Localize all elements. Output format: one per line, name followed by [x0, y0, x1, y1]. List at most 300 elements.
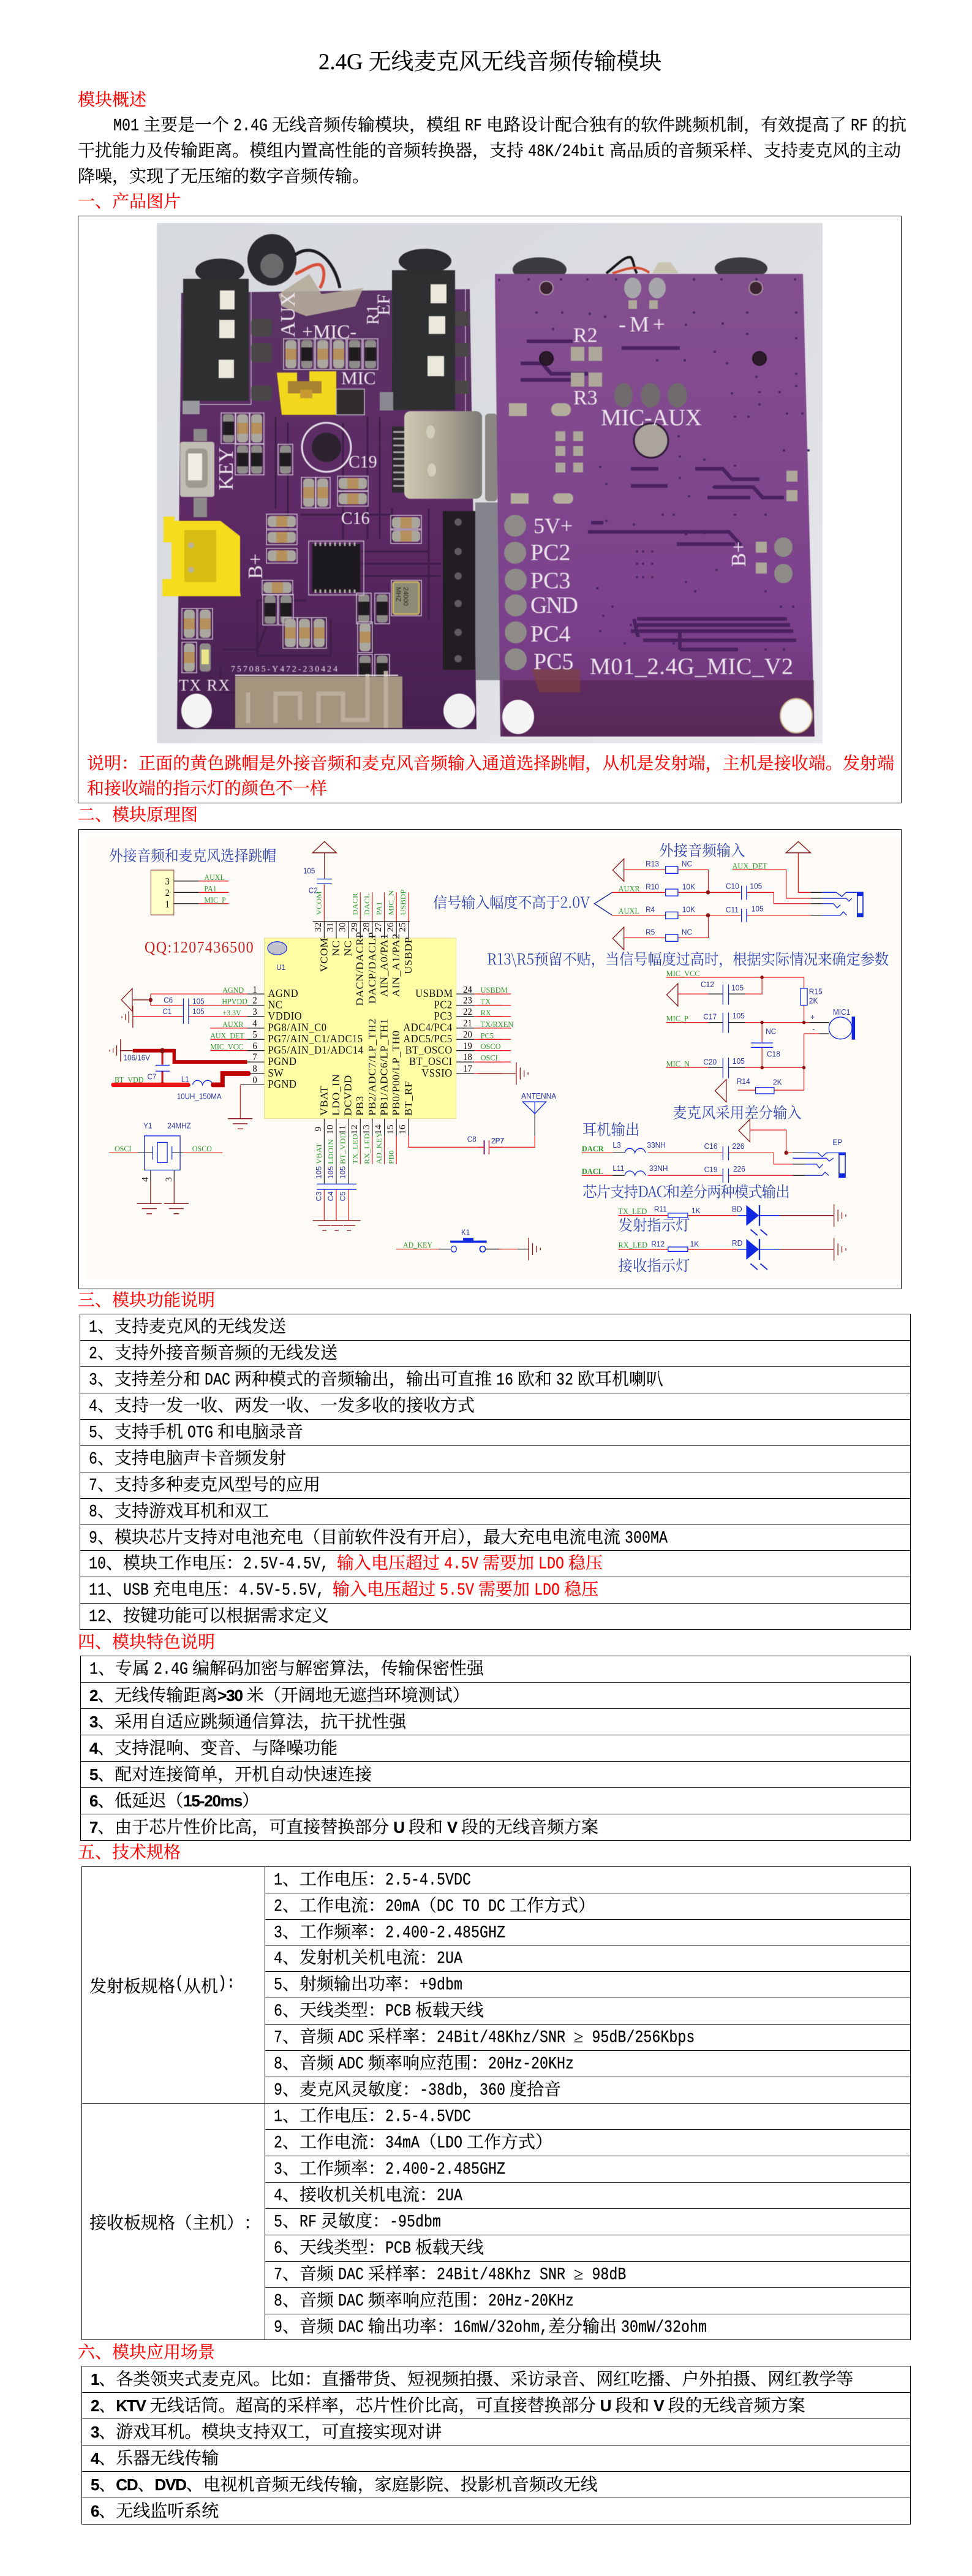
item 11: 、 充电电压： 输入电压超过 需要加 稳压 — [106, 1580, 598, 1599]
silkscreen labels back: R3 — [573, 387, 598, 409]
item 9: 9 — [89, 1529, 97, 1548]
item 10: 4.5V — [444, 1555, 478, 1574]
earphone output: 芯片支持DAC和差分两种模式输出 — [582, 1180, 790, 1202]
microphone input: C20 — [703, 1058, 717, 1067]
chip U1: AGND — [268, 987, 298, 999]
spec 9 — [265, 2077, 910, 2104]
spec 8: 、音频 频率响应范围： — [282, 2054, 488, 2073]
spec 9: 、音频 输出功率： 差分输出 — [282, 2317, 617, 2336]
spec 7: ADC — [338, 2029, 364, 2048]
bottom pins: 16 — [397, 1124, 407, 1134]
crystal Y1: Y1 — [143, 1121, 153, 1131]
left pins: AGND — [222, 986, 244, 994]
mounting slots front — [181, 694, 475, 728]
earphone output: EP — [832, 1138, 842, 1146]
bottom pins: BT_VDD — [339, 1132, 347, 1164]
crystal — [391, 580, 421, 616]
spec 8: 8 — [274, 2292, 282, 2311]
item 8 — [80, 1499, 910, 1525]
right pins: 17 — [463, 1064, 472, 1074]
spec 3 — [265, 1920, 910, 1945]
left pins: C6 — [164, 996, 173, 1005]
feature 2: 2、无线传输距离>30米（开阔地无遮挡环境测试） — [89, 1686, 470, 1705]
heading: module overview: 模块概述 — [78, 91, 146, 110]
spec 4: 、接收机关机电流： — [282, 2186, 437, 2205]
net labels: TX — [481, 997, 491, 1006]
table: application scenarios — [81, 2366, 911, 2525]
crystal Y1: OSCO — [192, 1145, 212, 1153]
silkscreen labels front: KEY — [215, 447, 238, 490]
TX LED: TX_LED — [619, 1207, 647, 1216]
top pins: DACL — [363, 893, 371, 915]
bottom pins — [313, 1119, 504, 1230]
item 2: 2 — [89, 1345, 97, 1364]
net labels: OSCO — [481, 1042, 501, 1051]
feature 1 — [81, 1656, 910, 1683]
microphone input: R14 — [737, 1077, 750, 1086]
spec 9: 360 — [480, 2082, 505, 2101]
microphone input: 麦克风采用差分输入 — [672, 1100, 802, 1123]
bottom pins: C4 — [327, 1191, 335, 1201]
top pins: 31 — [325, 922, 335, 932]
item 8: 、支持游戏耳机和双工 — [97, 1502, 269, 1521]
left pins: HPVDD — [222, 997, 247, 1006]
silkscreen labels front: EF — [374, 294, 394, 316]
item 3: 3 — [89, 1371, 97, 1390]
right pins: 24 — [463, 985, 472, 995]
chip U1: BT_RF — [402, 1081, 414, 1116]
jumper cap — [277, 371, 364, 415]
net labels — [478, 986, 528, 1085]
top pins: 28 — [361, 922, 371, 932]
external audio input: 外接音频输入 — [659, 838, 745, 860]
external audio input: NC — [682, 928, 692, 937]
antenna: 2P7 — [491, 1137, 504, 1145]
microphone input: 105 — [733, 1057, 745, 1066]
earphone output: DACL — [582, 1167, 603, 1176]
table: module functions — [80, 1314, 911, 1630]
RX LED: 1K — [690, 1240, 699, 1249]
table: module features — [80, 1656, 911, 1841]
feature 3 — [81, 1709, 910, 1735]
spec 4: 4 — [274, 1950, 282, 1969]
spec 4: 4 — [274, 2187, 282, 2206]
item 11 — [80, 1577, 910, 1604]
R13 R5 note: R13\R5预留不贴，当信号幅度过高时，根据实际情况来确定参数 — [487, 947, 889, 969]
feature 1: 、专属 编解码加密与解密算法，传输保密性强 — [98, 1659, 484, 1678]
spec 7: 98dB — [592, 2266, 626, 2285]
spec 2: 20mA — [385, 1898, 420, 1917]
RX LED — [619, 1238, 846, 1275]
item 9 — [80, 1525, 910, 1551]
label: transmitter board — [82, 1867, 265, 2104]
silkscreen labels front: R1 — [364, 305, 383, 325]
spec 7 — [265, 2025, 910, 2051]
earphone output: C16 — [704, 1142, 718, 1151]
spec 6: 、天线类型： 板载天线 — [282, 2001, 484, 2020]
feature 3: 3、采用自适应跳频通信算法，抗干扰性强 — [89, 1713, 406, 1732]
microphone input: C12 — [701, 980, 714, 989]
feature 4 — [81, 1735, 910, 1762]
spec 3: 2.400-2.485GHZ — [385, 1924, 505, 1943]
spec 7: 95dB/256Kbps — [592, 2029, 695, 2048]
left pins: 8 — [252, 1064, 257, 1074]
item 3: DAC — [205, 1371, 230, 1390]
top pins: DACR — [351, 893, 359, 915]
microphone capsule — [247, 234, 363, 316]
item 5: OTG — [187, 1424, 213, 1443]
bottom pins: 105 — [339, 1166, 347, 1179]
microphone input: 2K — [809, 996, 818, 1006]
scenario 5: 5、CD、DVD、电视机音频无线传输，家庭影院、投影机音频改无线 — [91, 2476, 598, 2495]
scenario 6: 6、无线监听系统 — [91, 2502, 219, 2521]
spec 6: PCB — [385, 2002, 411, 2021]
spec 9: 16mW/32ohm, — [454, 2319, 548, 2338]
chip U1: AIN_A0/PA1 — [379, 933, 390, 997]
microphone input — [666, 969, 855, 1123]
scenario 2 — [82, 2393, 910, 2419]
chip U1: LDO_IN — [331, 1074, 342, 1116]
mounting hole — [302, 423, 351, 472]
spec 9: 9 — [274, 2082, 282, 2101]
right half of schematic — [433, 838, 889, 1275]
item 12: 12 — [89, 1608, 106, 1627]
jumper header — [109, 844, 276, 915]
left pins: MIC_VCC — [210, 1042, 243, 1051]
microphone input: 105 — [731, 983, 744, 992]
text block: overview paragraph: 2.4G — [233, 117, 268, 136]
spec 9: DAC — [338, 2319, 364, 2338]
spec 9: 、麦克风灵敏度： ， 度拾音 — [282, 2080, 561, 2099]
chip U1: NC — [268, 999, 282, 1011]
spec 6: 6 — [274, 2240, 282, 2259]
spec 7: 24Bit/48Khz/SNR — [437, 2029, 565, 2048]
text block: overview paragraph: RF — [465, 117, 482, 136]
vias — [499, 279, 808, 650]
external audio input: AUX_DET — [732, 862, 767, 871]
text block: red note: 说明：正面的黄色跳帽是外接音频和麦克风音频输入通道选择跳帽，从机是发射端，主机是接收端。发射端 — [87, 754, 894, 773]
microphone input: 105 — [733, 1012, 745, 1020]
item 4: 、支持一发一收、两发一收、一发多收的接收方式 — [97, 1396, 475, 1415]
feature 7: 7、由于芯片性价比高，可直接替换部分 U段和 V段的无线音频方案 — [89, 1818, 598, 1837]
feature 6: 6、低延迟（15-20ms） — [89, 1792, 259, 1811]
net labels: RX — [481, 1009, 491, 1017]
earphone output: DACR — [582, 1145, 604, 1153]
earphone output: 耳机输出 — [582, 1117, 639, 1139]
chip U1: PB3 — [355, 1096, 366, 1116]
TX LED: 1K — [691, 1207, 701, 1215]
spec 8: ADC — [338, 2055, 364, 2074]
spec 6 — [265, 2235, 910, 2262]
spec 8 — [265, 2288, 910, 2314]
power section: BT_VDD — [115, 1075, 144, 1085]
crystal Y1: OSCI — [115, 1145, 131, 1153]
left pins: 6 — [252, 1040, 257, 1051]
chip U1: PGND — [268, 1055, 296, 1067]
transmitter spec rows — [265, 1870, 910, 2104]
spec 5: 5 — [274, 1976, 282, 1995]
net labels: OSCI — [481, 1053, 498, 1063]
top pins: 25 — [397, 922, 407, 932]
external audio input: R4 — [646, 905, 655, 914]
item 9: 、模块芯片支持对电池充电（目前软件没有开启），最大充电电流电流 — [97, 1528, 620, 1547]
silkscreen labels back: B+ — [728, 541, 750, 567]
QQ contact: QQ:1207436500 — [145, 939, 254, 957]
spec 3: 3 — [274, 2161, 282, 2180]
spec 5: 5 — [274, 2213, 282, 2232]
external audio input: AUXL — [619, 907, 639, 915]
spec 9: -38db — [420, 2082, 462, 2101]
external audio input: C11 — [726, 906, 739, 914]
key K1 — [396, 1228, 502, 1252]
power section: L1 — [181, 1075, 189, 1084]
silkscreen labels back: 5V+ — [533, 513, 573, 538]
spec 3: 、工作频率： — [282, 2159, 385, 2178]
spec 8: DAC — [338, 2292, 364, 2311]
chip U1: PG5/AIN_D1/ADC14 — [268, 1044, 364, 1056]
microphone input: MIC_P — [666, 1014, 688, 1023]
chip U1: VCOM — [318, 938, 330, 972]
silkscreen labels back: PC4 — [530, 621, 570, 647]
right pins: 19 — [463, 1040, 472, 1051]
label: receiver board — [82, 2104, 265, 2339]
spec 2: 34mA — [385, 2134, 420, 2153]
silkscreen labels front: +MIC- — [302, 320, 356, 343]
item 6 — [80, 1446, 910, 1472]
mounting holes back — [502, 281, 812, 734]
item 4 — [80, 1393, 910, 1420]
item 3: 16 — [496, 1371, 513, 1390]
top pins: 29 — [349, 922, 360, 932]
chip U1: U1 — [276, 963, 285, 972]
item 5: 、支持手机 和电脑录音 — [97, 1423, 303, 1442]
silkscreen labels back: M01_2.4G_MIC_V2 — [590, 654, 793, 680]
crystal Y1 — [109, 1121, 222, 1214]
text block: overview paragraph: M01 — [113, 117, 139, 136]
item 11: 11 — [89, 1582, 106, 1601]
heading: module features: 四、模块特色说明 — [78, 1633, 215, 1652]
spec 2 — [265, 2130, 910, 2156]
external audio input: R13 — [646, 860, 659, 868]
spec 4 — [265, 2183, 910, 2209]
spec 5: 、射频输出功率： — [282, 1975, 420, 1994]
silkscreen labels front: B+ — [244, 553, 267, 579]
tact switch — [180, 429, 214, 517]
item 11: USB — [123, 1582, 149, 1601]
item 11: 4.5V-5.5V, — [239, 1582, 325, 1601]
spec 3 — [265, 2156, 910, 2183]
chip U1: DCVDD — [342, 1075, 353, 1116]
heading: schematic: 二、模块原理图 — [78, 806, 198, 825]
bottom pins: C5 — [339, 1191, 347, 1201]
text block: overview paragraph: 干扰能力及传输距离。模组内置高性能的音频转换器，支持 高品质的音频采样、支持麦克风的主动 — [78, 142, 901, 161]
spec 9: 9 — [274, 2319, 282, 2338]
item 4: 4 — [89, 1398, 97, 1417]
earphone output: C19 — [704, 1165, 718, 1174]
item 12: 、按键功能可以根据需求定义 — [106, 1607, 329, 1626]
microphone input: R15 — [809, 987, 823, 996]
spec 1: 2.5-4.5VDC — [385, 1871, 471, 1890]
spec 9: 30mW/32ohm — [621, 2319, 707, 2338]
item 8: 8 — [89, 1503, 97, 1522]
spec 1 — [265, 1867, 910, 1893]
net labels: TX/RXEN — [481, 1020, 513, 1029]
spec 8: 20Hz-20KHz — [488, 2055, 574, 2074]
spec 2: 2 — [274, 2134, 282, 2153]
item 10: 10 — [89, 1555, 106, 1574]
panel: schematic — [78, 829, 902, 1289]
spec 1 — [265, 2104, 910, 2130]
bottom pins: RX_LED — [363, 1134, 371, 1164]
signal amplitude note: 信号输入幅度不高于2.0V — [433, 890, 590, 912]
label: transmitter board: 发射板规格 从机 — [89, 1977, 218, 1996]
silkscreen labels front — [179, 292, 394, 694]
feature 4: 4、支持混响、变音、与降噪功能 — [89, 1739, 337, 1758]
scenario 2: 2、KTV无线话筒。超高的采样率，芯片性价比高，可直接替换部分 U段和 V段的无线音频方案 — [91, 2396, 805, 2415]
scenario 1: 1、各类领夹式麦克风。比如：直播带货、短视频拍摄、采访录音、网红吃播、户外拍摄、网红教学等 — [91, 2370, 853, 2389]
net labels: USBDM — [481, 986, 508, 994]
crystal: MHZ — [394, 587, 402, 602]
spec 3: 、工作频率： — [282, 1923, 385, 1942]
feature 2 — [81, 1683, 910, 1709]
power section: 10UH_150MA — [177, 1092, 222, 1101]
crystal: 24000 — [402, 587, 409, 606]
spec 3: 3 — [274, 1924, 282, 1943]
item 6: 6 — [89, 1450, 97, 1469]
chip U1: DACN/DACRP — [355, 931, 366, 1006]
top pins: 32 — [314, 922, 323, 932]
feature 1: 1 — [89, 1661, 98, 1680]
left pins: 0 — [252, 1075, 257, 1086]
chip U1: NC — [331, 940, 342, 957]
RX LED: RD — [732, 1239, 742, 1248]
label: receiver board: ： — [244, 2213, 261, 2233]
silkscreen labels front: TX RX — [179, 676, 230, 694]
bottom pins: TX_LED — [351, 1134, 359, 1164]
scenario 1 — [82, 2366, 910, 2393]
bottom pins: 105 — [315, 1166, 323, 1179]
spec 5 — [265, 1972, 910, 1998]
left pins: C1 — [163, 1007, 172, 1016]
bottom pins: 10 — [325, 1124, 335, 1134]
external audio input — [595, 838, 863, 950]
top pins: MIC_N — [387, 890, 395, 915]
item 5 — [80, 1420, 910, 1446]
silkscreen labels front: C19 — [348, 453, 377, 472]
heading: technical specs: 五、技术规格 — [78, 1843, 181, 1862]
feature 5 — [81, 1762, 910, 1788]
earphone output — [582, 1117, 845, 1202]
silkscreen labels front: MIC — [341, 368, 376, 388]
right pins: 22 — [463, 1007, 472, 1017]
spec 1: 2.5-4.5VDC — [385, 2108, 471, 2127]
left pins — [121, 985, 265, 1086]
item 1 — [80, 1314, 910, 1341]
right pins: 18 — [463, 1052, 472, 1063]
spec 4: 2UA — [437, 2187, 462, 2206]
spec 5: RF — [300, 2213, 317, 2232]
spec 7: 24Bit/48Khz SNR — [437, 2266, 565, 2285]
audio jack left — [183, 259, 272, 414]
scenario 4 — [82, 2445, 910, 2472]
group: receiver board specs — [89, 2104, 910, 2339]
spec 5: +9dbm — [420, 1976, 462, 1995]
chip U1: PC3 — [434, 1010, 453, 1022]
item 1: 、支持麦克风的无线发送 — [97, 1317, 286, 1336]
RX LED: R12 — [651, 1240, 665, 1249]
spec 5: -95dbm — [390, 2213, 441, 2232]
table: technical specs — [81, 1866, 911, 2340]
left pins: 4 — [252, 1018, 257, 1029]
spec 2: 、工作电流： （ 工作方式） — [282, 1896, 595, 1915]
microphone input: + — [810, 1012, 815, 1021]
battery connector — [162, 517, 241, 596]
RX LED: 接收指示灯 — [619, 1253, 690, 1275]
scenario 4: 4、乐器无线传输 — [91, 2449, 219, 2468]
crystal Y1: 4 — [140, 1177, 150, 1182]
spec 5: 、 灵敏度： — [282, 2212, 390, 2231]
item 2: 、支持外接音频音频的无线发送 — [97, 1344, 337, 1363]
top pins: 26 — [385, 922, 396, 932]
spec 5 — [265, 2209, 910, 2235]
crystal Y1: 24MHZ — [168, 1121, 191, 1131]
chip U1: PB1/ADC6/LP_TH1 — [379, 1018, 390, 1116]
bottom pins: C3 — [315, 1191, 323, 1201]
text block: red note: 和接收端的指示灯的颜色不一样 — [87, 779, 327, 798]
earphone output: L11 — [612, 1164, 625, 1173]
spec 2 — [265, 1893, 910, 1920]
bottom pins: AD_KEY — [375, 1132, 383, 1164]
earphone output: 226 — [733, 1165, 745, 1173]
TX LED — [619, 1204, 846, 1235]
text block: red note — [87, 754, 894, 798]
top pins: 27 — [374, 922, 383, 932]
earphone output: 33NH — [649, 1164, 668, 1173]
bottom pins: VBAT — [315, 1143, 323, 1164]
net labels: PC5 — [481, 1031, 494, 1040]
schematic diagram — [109, 838, 889, 1275]
chip U1: PB0/P00/LP_TH0 — [391, 1030, 402, 1116]
spec 2: LDO — [437, 2134, 462, 2153]
jumper header: 3 — [165, 876, 170, 887]
receiver spec rows — [265, 2107, 910, 2338]
top pins: C2 — [309, 886, 318, 895]
label: receiver board: 接收板规格（主机） — [89, 2213, 244, 2233]
jumper header: 1 — [165, 900, 170, 910]
microphone input: MIC_VCC — [666, 969, 700, 978]
jumper header: PA1 — [204, 884, 217, 893]
left pins: 105 — [192, 1007, 205, 1016]
item 9: 300MA — [625, 1529, 668, 1548]
left half of schematic — [109, 841, 504, 1252]
item 2 — [80, 1341, 910, 1367]
crystal Y1: 3 — [164, 1177, 174, 1182]
feature 6 — [81, 1788, 910, 1814]
jumper header: 外接音频和麦克风选择跳帽 — [109, 844, 276, 865]
chip U1: ADC5/PC5 — [403, 1032, 453, 1045]
chip U1: PG8/AIN_C0 — [268, 1021, 326, 1034]
silkscreen labels front: C16 — [341, 509, 370, 528]
external audio input: AUXR — [619, 884, 640, 893]
spec 6: PCB — [385, 2240, 411, 2259]
silkscreen labels back: MIC-AUX — [601, 405, 702, 431]
chip U1: PB2/ADC7/LP_TH2 — [366, 1018, 378, 1116]
bottom pins: 2P7 — [491, 1136, 504, 1145]
item 10: 2.5V-4.5V, — [243, 1555, 329, 1574]
top pins: 105 — [303, 866, 315, 875]
spec 1: 1 — [274, 1871, 282, 1890]
spec 6: 、天线类型： 板载天线 — [282, 2238, 484, 2257]
